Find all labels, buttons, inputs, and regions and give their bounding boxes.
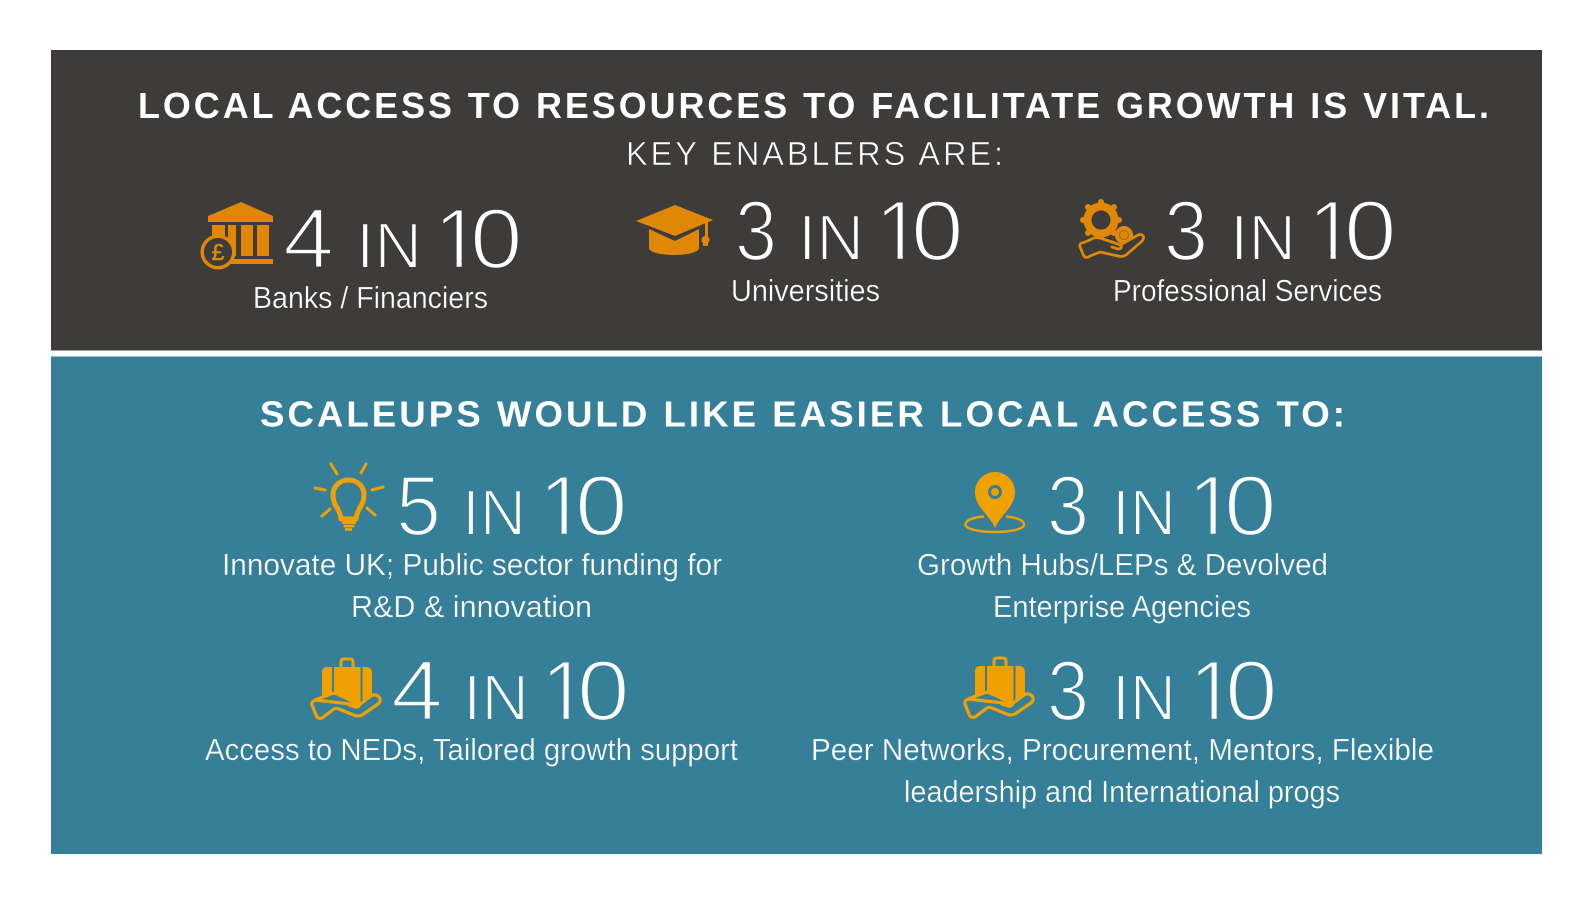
stat: 4 in 10: 4 — [391, 644, 443, 739]
label: banks: Banks / Financiers — [253, 280, 488, 315]
label: growth hubs: Growth Hubs/LEPs & Devolved — [917, 547, 1328, 582]
label: peer networks: Peer Networks, Procurement, Mentors, Flexible — [811, 732, 1434, 767]
icon: hand with gears — [1080, 202, 1144, 257]
icon: hand with briefcase, right — [965, 658, 1034, 718]
stat: 3 in 10 universities — [735, 184, 964, 279]
label: access to neds: Access to NEDs, Tailored growth support — [205, 732, 738, 767]
label: growth hubs: Enterprise Agencies — [993, 589, 1251, 624]
stat: 4 in 10 banks: 0 — [470, 192, 523, 287]
stat: 3 in 10 growth hubs: 0 — [1224, 459, 1277, 554]
stat: 3 in 10 growth hubs — [1047, 459, 1277, 554]
label: professional services: Professional Services — [1113, 273, 1382, 308]
stat: 3 in 10 peer networks: 0 — [1225, 644, 1278, 739]
stat: 5 in 10: 5 — [396, 459, 441, 554]
stat: 5 in 10: 1 — [539, 459, 586, 554]
stat: 3 in 10 peer networks: 3 — [1047, 644, 1089, 739]
icon: hand with briefcase, left — [312, 659, 381, 719]
stat: 5 in 10: IN — [462, 476, 526, 549]
stat: 3 in 10 universities: 3 — [735, 184, 777, 279]
stat: 3 in 10 universities: 0 — [911, 184, 964, 279]
label: peer networks — [811, 732, 1434, 809]
label: universities: Universities — [731, 273, 880, 308]
stat: 3 in 10 peer networks: IN — [1112, 661, 1176, 734]
stat: 4 in 10 — [391, 644, 630, 739]
stat: 4 in 10: IN — [463, 661, 529, 734]
stat: 3 in 10 growth hubs: 3 — [1047, 459, 1089, 554]
label: innovate uk: R&D & innovation — [351, 589, 592, 624]
stat: 4 in 10 banks: IN — [356, 209, 422, 282]
icon: light bulb — [315, 464, 383, 530]
stat: 3 in 10 professional services: IN — [1230, 201, 1296, 274]
stat: 3 in 10 peer networks — [1047, 644, 1278, 739]
subtitle: KEY ENABLERS ARE: — [626, 135, 1006, 172]
stat: 4 in 10: 1 — [541, 644, 588, 739]
stat: 3 in 10 professional services: 0 — [1344, 184, 1397, 279]
stat: 5 in 10: 0 — [575, 459, 628, 554]
stat: 3 in 10 professional services: 3 — [1164, 184, 1208, 279]
icon: bank with pound coin — [202, 202, 273, 268]
stat: 5 in 10 — [396, 459, 628, 554]
stat: 4 in 10 banks — [283, 192, 523, 287]
icon: graduation cap — [636, 205, 713, 255]
label: peer networks: leadership and International progs — [904, 774, 1340, 809]
title: LOCAL ACCESS TO RESOURCES TO FACILITATE GROWTH IS VITAL. — [138, 85, 1492, 126]
stat: 3 in 10 professional services — [1164, 184, 1397, 279]
label: innovate uk: Innovate UK; Public sector funding for — [222, 547, 722, 582]
label: innovate uk — [222, 547, 722, 624]
stat: 4 in 10: 0 — [577, 644, 630, 739]
stat: 4 in 10 banks: 4 — [283, 192, 334, 287]
panel: easier local access — [51, 356, 1542, 854]
stat: 3 in 10 universities: 1 — [875, 184, 922, 279]
panel: key enablers — [51, 50, 1542, 350]
stat: 3 in 10 professional services: 1 — [1308, 184, 1355, 279]
label: growth hubs — [917, 547, 1328, 624]
icon: bank with pound coin: £ — [212, 239, 225, 265]
stat: 4 in 10 banks: 1 — [434, 192, 481, 287]
stat: 3 in 10 growth hubs: IN — [1112, 476, 1176, 549]
stat: 3 in 10 growth hubs: 1 — [1188, 459, 1235, 554]
heading: SCALEUPS WOULD LIKE EASIER LOCAL ACCESS TO: — [260, 394, 1348, 434]
icon: map pin — [966, 472, 1024, 532]
stat: 3 in 10 peer networks: 1 — [1189, 644, 1236, 739]
stat: 3 in 10 universities: IN — [798, 201, 864, 274]
